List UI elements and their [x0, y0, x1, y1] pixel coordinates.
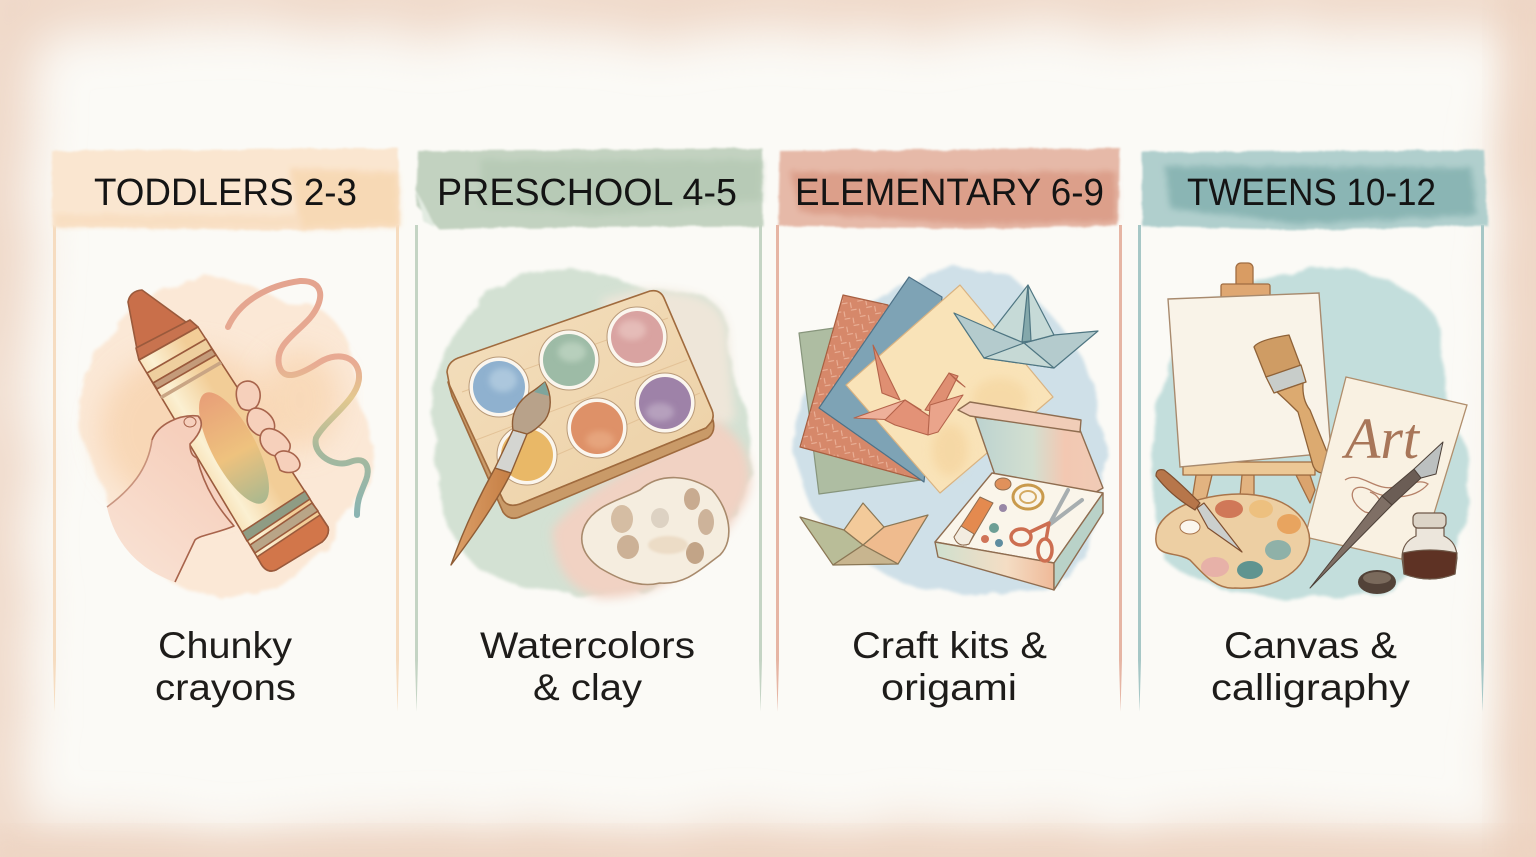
header band — [778, 148, 1120, 229]
patterned orange paper — [800, 295, 921, 480]
icon: flat brush — [1254, 335, 1331, 473]
box lid flap — [958, 402, 1081, 432]
icon: canvas — [1168, 293, 1331, 467]
header band — [416, 148, 763, 230]
icon: palette knife — [1156, 470, 1242, 552]
panel: tweens — [1138, 150, 1488, 712]
heading: TWEENS 10-12 — [1187, 172, 1436, 214]
heading: TODDLERS 2-3 — [94, 172, 357, 214]
caption: Craft kits & — [852, 625, 1047, 666]
icon: calligraphy card — [1305, 377, 1467, 563]
icon: origami boat bottom — [800, 503, 928, 565]
icon: easel — [1183, 263, 1315, 503]
lettering: Art — [1341, 406, 1421, 471]
icon: paintbrush — [451, 382, 550, 565]
heading: PRESCHOOL 4-5 — [437, 172, 737, 214]
caption: Chunky — [158, 625, 293, 666]
scissors — [1049, 490, 1082, 525]
icon: clay lump — [582, 478, 729, 585]
icon: ink cap — [1358, 570, 1396, 594]
icon: thumb and palm outline — [107, 416, 234, 582]
caption: Canvas & — [1224, 625, 1397, 666]
heading: ELEMENTARY 6-9 — [795, 172, 1104, 214]
caption — [852, 625, 1047, 708]
icon: origami boat top — [954, 285, 1098, 368]
icon: artist palette — [1156, 494, 1310, 588]
icon: hand fingers — [236, 381, 300, 472]
icon: hand back — [107, 416, 234, 582]
watercolor blob — [795, 268, 1104, 596]
watercolor blob — [432, 268, 752, 598]
box front — [935, 542, 1054, 590]
watercolor blob — [80, 275, 373, 597]
beads — [999, 504, 1007, 512]
panel: elementary — [776, 148, 1122, 712]
icon: paper stack — [799, 277, 1053, 494]
green paper — [799, 328, 921, 494]
column rules — [53, 225, 399, 712]
box lid — [975, 417, 1103, 497]
crayon label oval — [185, 383, 283, 513]
caption: origami — [881, 667, 1017, 708]
header band — [1142, 150, 1488, 230]
icon: dip pen — [1310, 442, 1443, 588]
flourish — [1345, 477, 1428, 513]
icon: origami crane — [854, 345, 965, 435]
caption — [1211, 625, 1411, 708]
caption: Watercolors — [480, 625, 695, 666]
caption: calligraphy — [1211, 667, 1411, 708]
paint wells — [469, 307, 695, 485]
watercolor blob — [1153, 269, 1470, 598]
panel: toddlers — [52, 148, 400, 712]
blue paper — [819, 277, 942, 482]
column rules — [415, 225, 762, 712]
caption: & clay — [533, 667, 643, 708]
twine coil — [1013, 485, 1043, 509]
header band — [52, 148, 400, 230]
column rules — [776, 225, 1122, 712]
caption: crayons — [155, 667, 296, 708]
column rules — [1138, 225, 1484, 712]
icon: ink bottle — [1402, 513, 1457, 579]
icon: squiggle stroke — [228, 281, 368, 515]
cream paper — [846, 285, 1053, 493]
icon: crayon — [128, 290, 328, 571]
panel: preschool — [415, 148, 763, 712]
icon: paint tray — [447, 291, 714, 518]
glue stick — [954, 497, 993, 545]
caption — [480, 625, 695, 708]
icon: craft box — [935, 402, 1103, 590]
caption — [155, 625, 296, 708]
box floor — [935, 473, 1103, 563]
